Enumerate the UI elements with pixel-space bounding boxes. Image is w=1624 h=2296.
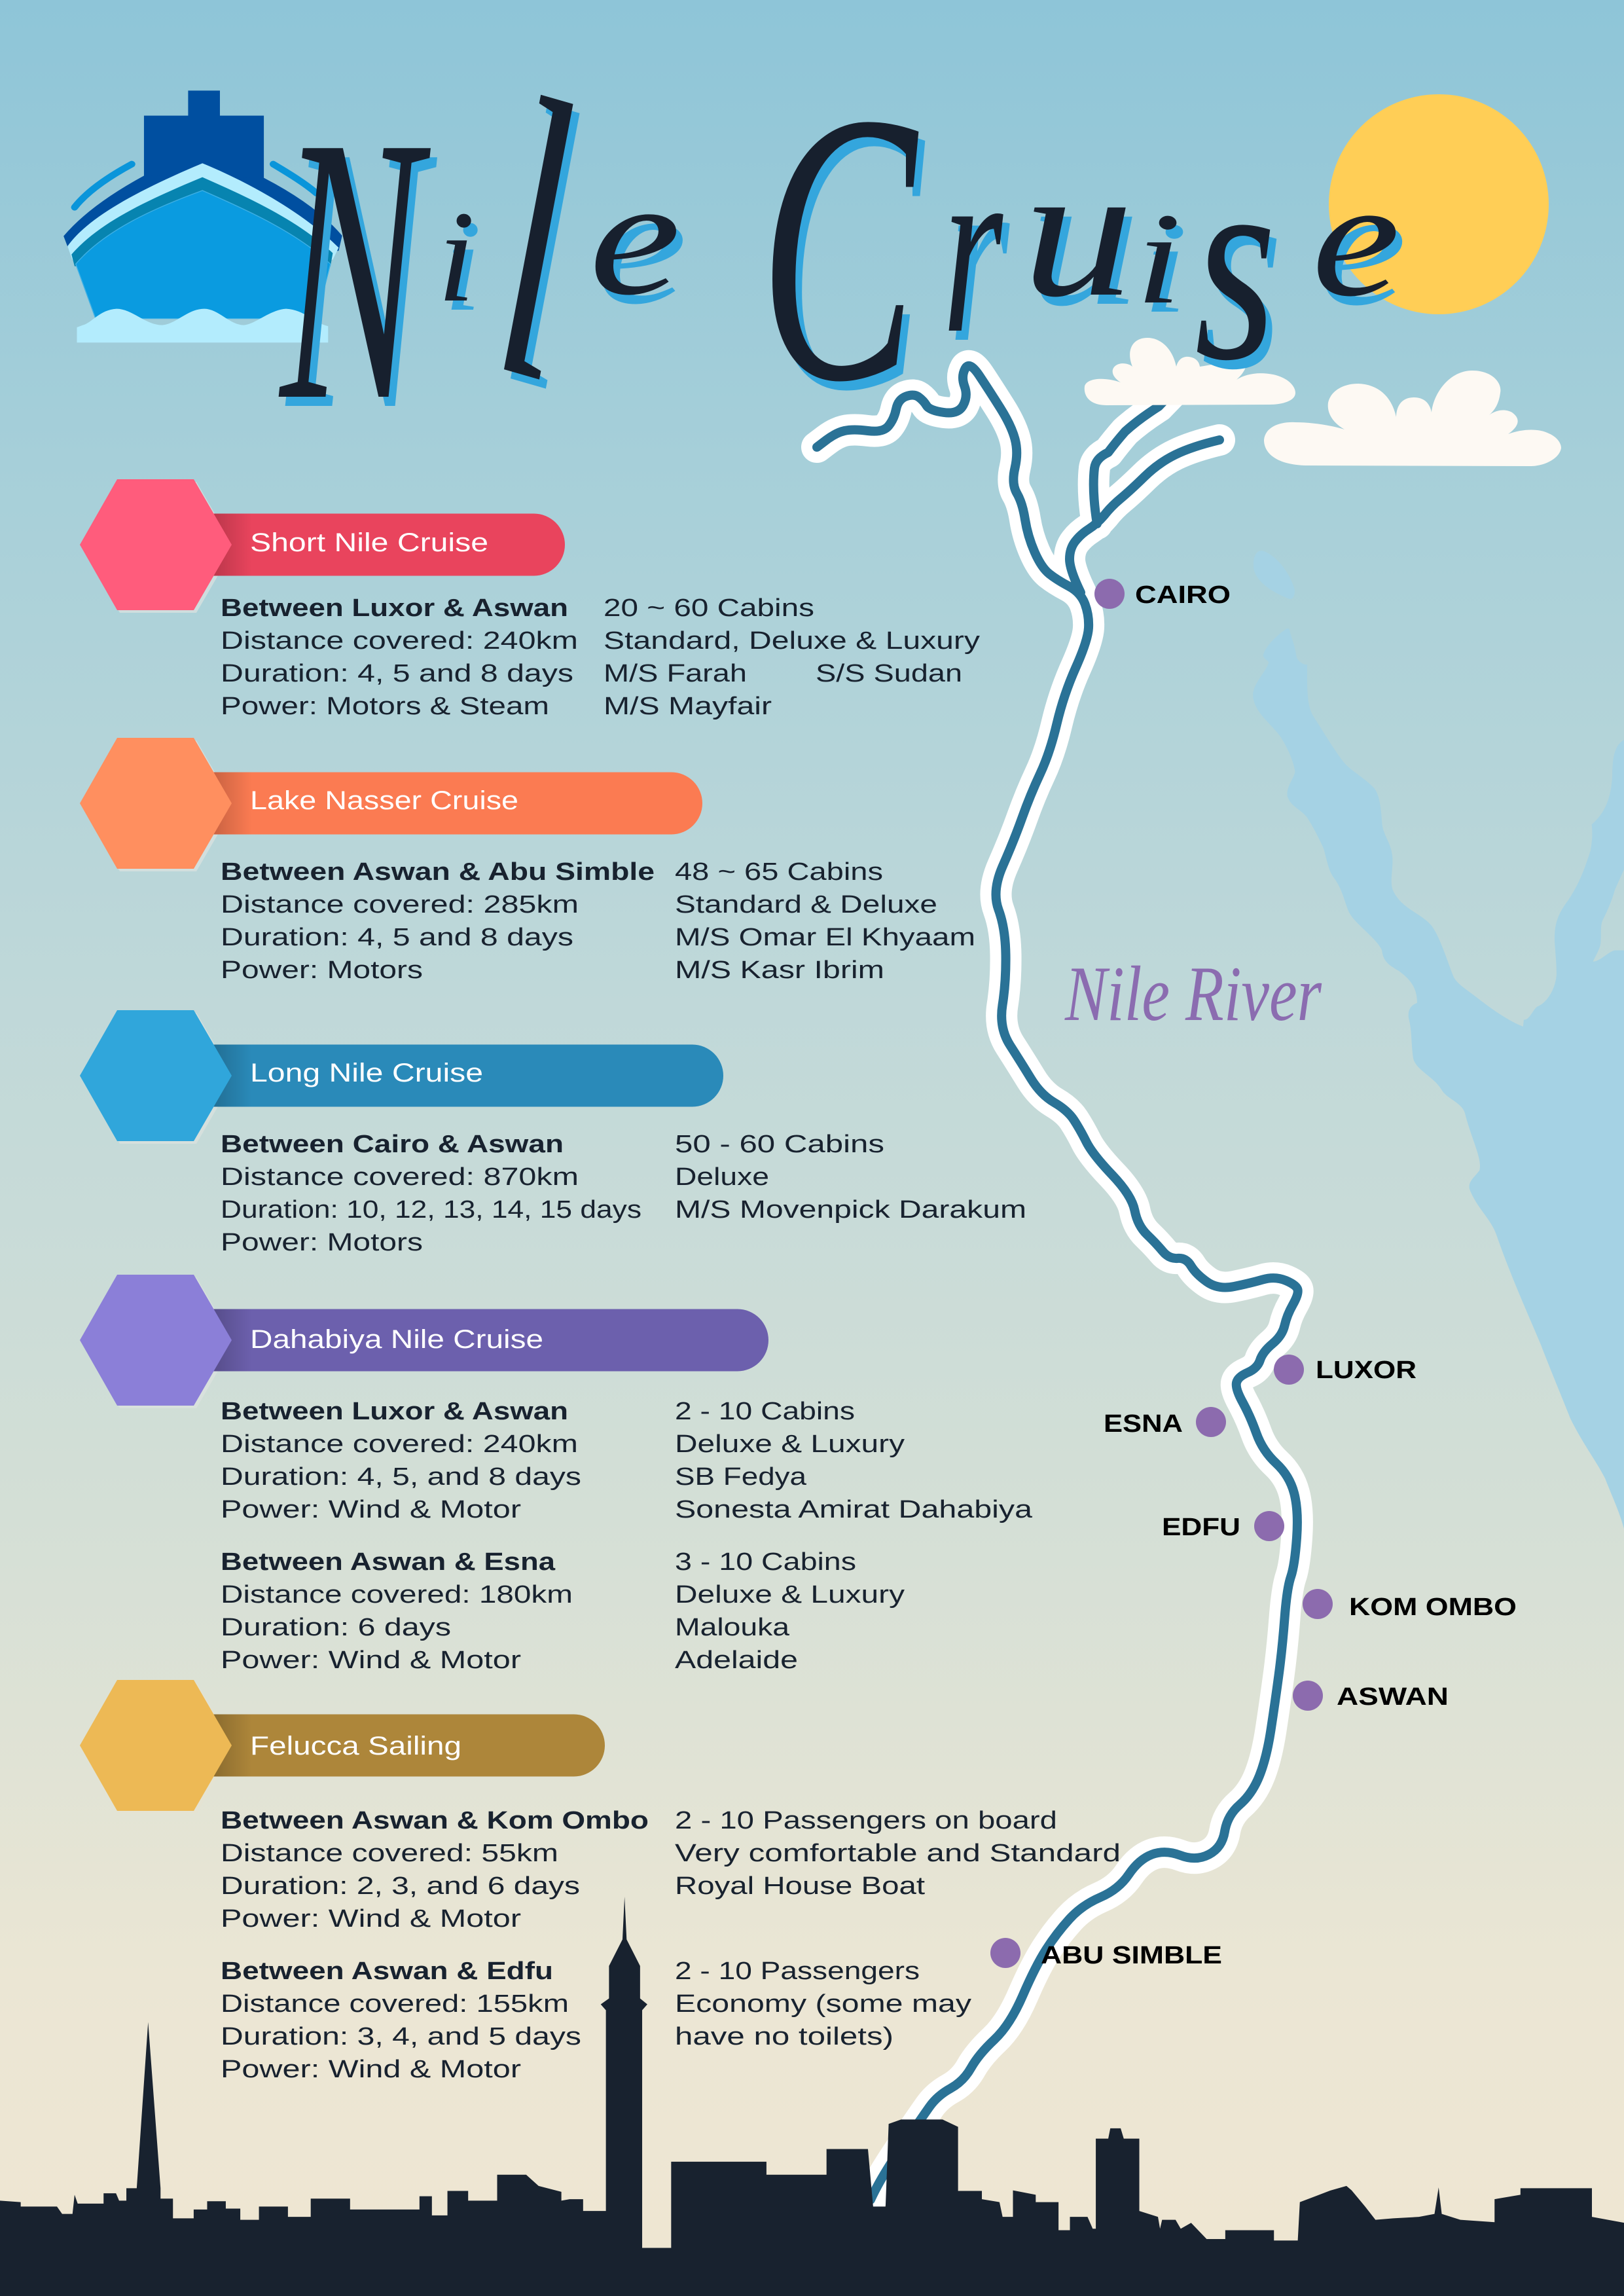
title shadow: C [766, 43, 928, 471]
panel: Long Nile Cruise [80, 1010, 1026, 1256]
title main lettering: r [943, 109, 1005, 385]
route details: Aswan to Kom Ombo [221, 1807, 649, 1933]
boat details: Aswan to Edfu: Economy (some may [675, 1990, 971, 2018]
route details: Between Aswan & Abu Simble [221, 858, 655, 886]
boat details: Aswan to Esna: 3 - 10 Cabins [675, 1548, 856, 1576]
panel: Dahabiya Nile Cruise [80, 1275, 1033, 1674]
title main lettering: e [1312, 146, 1400, 331]
route details: Distance covered: 285km [221, 891, 579, 919]
route details: Aswan to Edfu: Between Aswan & Edfu [221, 1958, 553, 1985]
city marker: Abu Simble: ABU SIMBLE [1041, 1942, 1222, 1969]
heading: Felucca Sailing [250, 1732, 461, 1760]
Red Sea water map shape [1253, 551, 1624, 1529]
icon: sun [1329, 94, 1549, 314]
route details: Luxor to Aswan: Duration: 4, 5, and 8 days [221, 1463, 581, 1491]
ship funnel [144, 90, 264, 181]
boat details: M/S Omar El Khyaam [675, 924, 975, 951]
panel: Felucca Sailing [80, 1680, 1121, 2083]
panel: Short Nile Cruise [80, 479, 980, 720]
banner [80, 1275, 768, 1408]
title shadow: r [949, 118, 1012, 394]
route details: Aswan to Edfu [221, 1958, 581, 2083]
heading: Long Nile Cruise [250, 1059, 483, 1087]
ship side rails [75, 164, 316, 208]
boat details: M/S Mayfair [604, 693, 772, 720]
icon: cruise ship [63, 90, 342, 342]
route details: Luxor to Aswan: Power: Wind & Motor [221, 1496, 521, 1523]
route details [221, 1131, 641, 1256]
title main lettering: l [478, 10, 610, 463]
route details: Duration: 4, 5 and 8 days [221, 660, 573, 687]
city skyline silhouette [0, 1897, 1624, 2296]
route details: Luxor to Aswan: Between Luxor & Aswan [221, 1398, 568, 1425]
river blue channel [817, 366, 1298, 2200]
title main lettering: s [1195, 107, 1276, 419]
city marker: Esna [1104, 1407, 1226, 1438]
boat details: Aswan to Esna: Adelaide [675, 1647, 798, 1674]
boat details: Aswan to Kom Ombo: Royal House Boat [675, 1872, 926, 1900]
route details: Distance covered: 870km [221, 1163, 579, 1191]
boat details: Aswan to Edfu: have no toilets) [675, 2023, 893, 2050]
boat details: Luxor to Aswan: Sonesta Amirat Dahabiya [675, 1496, 1033, 1523]
title main lettering: i [437, 185, 475, 329]
banner [80, 1680, 605, 1813]
boat details: Deluxe [675, 1163, 769, 1191]
ship waves [77, 309, 328, 342]
title [277, 10, 1407, 488]
route details: Aswan to Kom Ombo: Between Aswan & Kom Ombo [221, 1807, 649, 1834]
route details: Luxor to Aswan [221, 1398, 581, 1523]
city marker: Kom Ombo [1303, 1589, 1517, 1621]
boat details: Luxor to Aswan [675, 1398, 1033, 1523]
title main lettering: i [1136, 187, 1182, 331]
route details: Between Luxor & Aswan [221, 594, 568, 622]
boat details: Aswan to Kom Ombo [675, 1807, 1121, 1900]
route details: Distance covered: 240km [221, 627, 578, 655]
city marker: Aswan [1293, 1681, 1449, 1711]
cloud right [1264, 371, 1561, 466]
city marker: Edfu: EDFU [1162, 1514, 1240, 1541]
title shadow: e [596, 154, 687, 339]
city marker: Cairo: CAIRO [1135, 581, 1231, 609]
boat details: M/S Kasr Ibrim [675, 957, 884, 984]
boat details [604, 594, 980, 720]
ship hull teal band [71, 177, 333, 266]
title main lettering: u [1022, 126, 1134, 336]
boat details: Aswan to Edfu: 2 - 10 Passengers [675, 1958, 920, 1985]
boat details: Standard & Deluxe [675, 891, 937, 919]
boat details: S/S Sudan [816, 660, 962, 687]
heading: Short Nile Cruise [250, 528, 488, 557]
route details: Aswan to Edfu: Distance covered: 155km [221, 1990, 569, 2018]
title shadow: i [444, 194, 482, 338]
route details: Aswan to Esna [221, 1548, 573, 1674]
banner [80, 479, 565, 613]
route details: Aswan to Esna: Duration: 6 days [221, 1614, 451, 1641]
boat details: M/S Farah [604, 660, 747, 687]
boat details: Aswan to Esna: Deluxe & Luxury [675, 1581, 905, 1609]
route details [221, 858, 655, 984]
boat details [675, 858, 975, 984]
route details [221, 594, 578, 720]
title main lettering: e [589, 145, 681, 330]
city marker: Luxor: LUXOR [1316, 1357, 1416, 1384]
cloud left [1085, 338, 1295, 405]
route details: Aswan to Kom Ombo: Distance covered: 55km [221, 1840, 558, 1867]
boat details: 20 ~ 60 Cabins [604, 594, 814, 622]
route details: Aswan to Edfu: Duration: 3, 4, and 5 days [221, 2023, 581, 2050]
ship hull body [76, 191, 331, 319]
title main lettering: N [277, 59, 432, 479]
boat details: 50 - 60 Cabins [675, 1131, 884, 1158]
boat details [675, 1131, 1026, 1224]
title shadow: N [283, 68, 439, 488]
banner [80, 1010, 723, 1144]
route details: Power: Motors & Steam [221, 693, 549, 720]
boat details: M/S Movenpick Darakum [675, 1196, 1026, 1224]
city marker: Kom Ombo: KOM OMBO [1349, 1594, 1517, 1621]
route details: Between Cairo & Aswan [221, 1131, 564, 1158]
city marker: Aswan: ASWAN [1337, 1683, 1449, 1711]
title shadow: s [1201, 117, 1283, 428]
route details: Aswan to Kom Ombo: Power: Wind & Motor [221, 1905, 521, 1933]
boat details: Aswan to Esna [675, 1548, 905, 1674]
boat details: Aswan to Esna: Malouka [675, 1614, 790, 1641]
river label: Nile River [1064, 950, 1322, 1037]
route details: Duration: 10, 12, 13, 14, 15 days [221, 1196, 641, 1224]
ship hull light band [67, 163, 338, 260]
gulf and sea [1253, 629, 1624, 1529]
title shadow: e [1318, 155, 1407, 340]
route details: Aswan to Edfu: Power: Wind & Motor [221, 2056, 521, 2083]
route details: Aswan to Esna: Power: Wind & Motor [221, 1647, 521, 1674]
boat details: Aswan to Kom Ombo: 2 - 10 Passengers on board [675, 1807, 1057, 1834]
banner [80, 738, 702, 871]
boat details: Luxor to Aswan: 2 - 10 Cabins [675, 1398, 855, 1425]
title main lettering: C [759, 33, 921, 462]
city marker: Abu Simble [990, 1938, 1222, 1969]
boat details: Luxor to Aswan: Deluxe & Luxury [675, 1430, 905, 1458]
route details: Luxor to Aswan: Distance covered: 240km [221, 1430, 578, 1458]
city marker: Edfu [1162, 1511, 1284, 1541]
route details: Power: Motors [221, 1229, 423, 1256]
title shadow: i [1142, 196, 1188, 340]
boat details: Standard, Deluxe & Luxury [604, 627, 980, 655]
boat details: Luxor to Aswan: SB Fedya [675, 1463, 807, 1491]
boat details: 48 ~ 65 Cabins [675, 858, 883, 886]
route details: Duration: 4, 5 and 8 days [221, 924, 573, 951]
ship hull dark band [63, 175, 342, 251]
title shadow: u [1029, 135, 1140, 345]
heading: Lake Nasser Cruise [250, 786, 518, 815]
river white outline [817, 366, 1298, 2200]
heading: Dahabiya Nile Cruise [250, 1325, 543, 1354]
boat details: Aswan to Kom Ombo: Very comfortable and Standard [675, 1840, 1121, 1867]
boat details: Aswan to Edfu [675, 1958, 971, 2050]
panel: Lake Nasser Cruise [80, 738, 975, 984]
city marker: Luxor [1274, 1355, 1416, 1385]
city marker: Esna: ESNA [1104, 1410, 1183, 1438]
route details: Power: Motors [221, 957, 423, 984]
small lake [1254, 551, 1295, 599]
title shadow: l [485, 19, 617, 472]
Nile river line [817, 366, 1298, 2200]
route details: Aswan to Kom Ombo: Duration: 2, 3, and 6 days [221, 1872, 580, 1900]
route details: Aswan to Esna: Distance covered: 180km [221, 1581, 573, 1609]
route details: Aswan to Esna: Between Aswan & Esna [221, 1548, 556, 1576]
city marker: Cairo [1094, 579, 1231, 609]
